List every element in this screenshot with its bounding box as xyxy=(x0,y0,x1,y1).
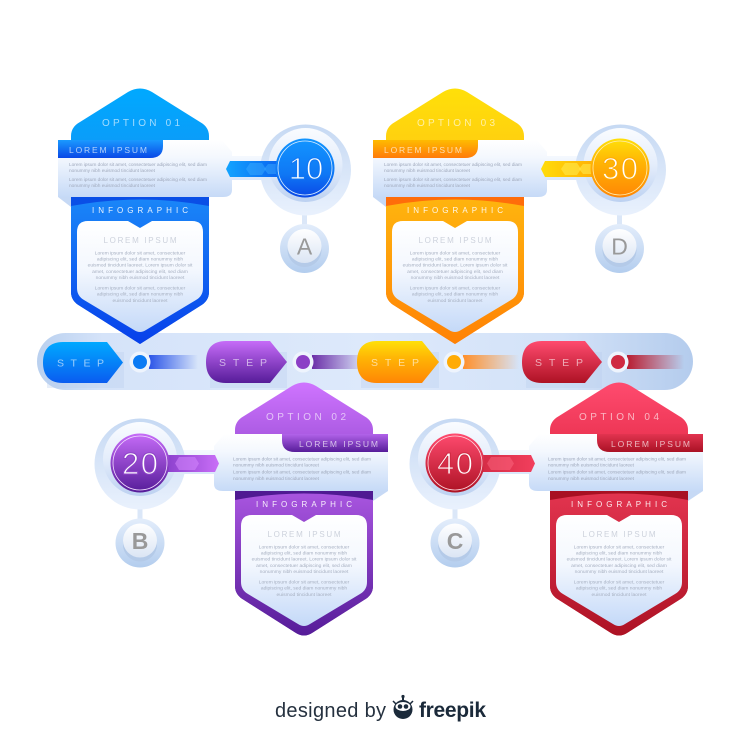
inner text: amet, consectetuer adipiscing elit, sed diam xyxy=(571,563,667,569)
inner text: nonummy nibh euismod tincidunt laoreet xyxy=(96,275,185,281)
badge: D: D xyxy=(611,234,628,260)
inner text: Lorem ipsum dolor sit amet, consectetuer xyxy=(259,580,350,586)
inner text: adipiscing elit, sed diam nonummy nibh xyxy=(261,551,347,557)
badge: 20: 20 xyxy=(122,446,158,481)
band text: Lorem ipsum dolor sit amet, consectetuer adipiscing elit, sed diam xyxy=(69,162,207,168)
band text xyxy=(548,456,686,482)
band text: nonummy nibh euismod tincidunt laoreet xyxy=(69,183,156,189)
band text: Lorem ipsum dolor sit amet, consectetuer adipiscing elit, sed diam xyxy=(233,470,371,476)
step 2 marker xyxy=(292,352,359,372)
band text xyxy=(233,456,371,482)
panel: option 02: LOREM IPSUM xyxy=(299,439,378,449)
inner text: Lorem ipsum dolor sit amet, consectetuer xyxy=(95,251,186,257)
icon: freepik mascot xyxy=(393,695,413,719)
band text: nonummy nibh euismod tincidunt laoreet xyxy=(69,168,156,174)
panel: option 04: INFOGRAPHIC xyxy=(571,500,667,509)
panel: option 03: LOREM IPSUM xyxy=(384,145,462,155)
inner text: euismod tincidunt laoreet xyxy=(428,298,483,304)
inner text: Lorem ipsum dolor sit amet, consectetuer xyxy=(410,251,501,257)
step 3 marker xyxy=(444,352,519,372)
panel: option 04: OPTION 04 xyxy=(579,412,659,423)
band text: nonummy nibh euismod tincidunt laoreet xyxy=(548,462,635,468)
panel: option 01: LOREM IPSUM xyxy=(69,145,147,155)
inner text: amet, consectetuer adipiscing elit, sed diam xyxy=(407,269,503,275)
badge: C xyxy=(430,518,480,568)
badge: 40 xyxy=(410,418,535,522)
badge: 30: 30 xyxy=(602,151,638,186)
inner text: adipiscing elit, sed diam nonummy nibh xyxy=(576,586,662,592)
band text: nonummy nibh euismod tincidunt laoreet xyxy=(384,168,471,174)
inner text: amet, consectetuer adipiscing elit, sed diam xyxy=(92,269,188,275)
band text: Lorem ipsum dolor sit amet, consectetuer adipiscing elit, sed diam xyxy=(384,162,522,168)
badge: C: C xyxy=(447,528,463,554)
inner text: euismod tincidunt laoreet. Lorem ipsum dolor sit xyxy=(567,557,672,563)
band text: Lorem ipsum dolor sit amet, consectetuer adipiscing elit, sed diam xyxy=(233,456,371,462)
step 1: STEP xyxy=(57,358,104,370)
panel: option 03 xyxy=(373,88,580,344)
badge: A xyxy=(280,224,329,273)
band text: nonummy nibh euismod tincidunt laoreet xyxy=(548,476,635,482)
inner text: nonummy nibh euismod tincidunt laoreet xyxy=(575,569,664,575)
inner text: adipiscing elit, sed diam nonummy nibh xyxy=(97,292,183,298)
inner text: adipiscing elit, sed diam nonummy nibh xyxy=(261,586,347,592)
badge: B xyxy=(116,518,164,568)
footer credit xyxy=(275,695,486,722)
band text: Lorem ipsum dolor sit amet, consectetuer adipiscing elit, sed diam xyxy=(384,177,522,183)
badge: 20 xyxy=(94,418,219,522)
badge: 10 xyxy=(226,124,351,228)
arrow xyxy=(226,161,280,177)
band text: nonummy nibh euismod tincidunt laoreet xyxy=(233,462,320,468)
arrow xyxy=(480,455,535,472)
step 3 xyxy=(357,341,439,383)
panel: option 02 xyxy=(181,382,388,636)
badge: 30 xyxy=(541,124,666,228)
step 1 xyxy=(43,342,123,383)
inner text: nonummy nibh euismod tincidunt laoreet xyxy=(411,275,500,281)
inner text: adipiscing elit, sed diam nonummy nibh xyxy=(412,257,498,263)
step 1 marker xyxy=(130,352,198,372)
arrow xyxy=(541,161,595,177)
panel: option 01: LOREM IPSUM xyxy=(104,236,177,245)
inner text xyxy=(567,545,672,598)
step 4 marker xyxy=(608,352,684,372)
panel: option 04 xyxy=(496,382,703,636)
band text: nonummy nibh euismod tincidunt laoreet xyxy=(384,183,471,189)
step bar xyxy=(37,333,693,390)
inner text xyxy=(88,251,193,304)
inner text: amet, consectetuer adipiscing elit, sed diam xyxy=(256,563,352,569)
inner text: Lorem ipsum dolor sit amet, consectetuer xyxy=(574,545,665,551)
inner text: euismod tincidunt laoreet xyxy=(113,298,168,304)
footer credit: freepik xyxy=(419,699,486,722)
panel: option 01: INFOGRAPHIC xyxy=(92,206,188,215)
inner text: adipiscing elit, sed diam nonummy nibh xyxy=(412,292,498,298)
band text xyxy=(384,162,522,189)
panel: option 03: INFOGRAPHIC xyxy=(407,206,503,215)
panel: option 02: LOREM IPSUM xyxy=(268,530,341,539)
panel: option 02: INFOGRAPHIC xyxy=(256,500,352,509)
step 2 xyxy=(206,341,287,383)
inner text: Lorem ipsum dolor sit amet, consectetuer xyxy=(410,286,501,292)
panel: option 03: LOREM IPSUM xyxy=(418,236,492,245)
band text: Lorem ipsum dolor sit amet, consectetuer adipiscing elit, sed diam xyxy=(69,177,207,183)
badge: 10: 10 xyxy=(289,151,323,186)
step 3: STEP xyxy=(371,357,419,369)
arrow xyxy=(165,455,219,472)
inner text: adipiscing elit, sed diam nonummy nibh xyxy=(97,257,183,263)
badge: D xyxy=(595,224,644,273)
panel: option 03: OPTION 03 xyxy=(417,118,495,129)
inner text: euismod tincidunt laoreet xyxy=(592,592,647,598)
panel: option 01: OPTION 01 xyxy=(102,118,180,129)
badge: A: A xyxy=(297,234,313,260)
inner text: adipiscing elit, sed diam nonummy nibh xyxy=(576,551,662,557)
inner text: euismod tincidunt laoreet. Lorem ipsum dolor sit xyxy=(88,263,193,269)
band text xyxy=(69,162,207,189)
step 4: STEP xyxy=(535,357,583,369)
panel: option 02: OPTION 02 xyxy=(266,412,346,423)
inner text: nonummy nibh euismod tincidunt laoreet xyxy=(260,569,349,575)
inner text: Lorem ipsum dolor sit amet, consectetuer xyxy=(95,286,186,292)
inner text: euismod tincidunt laoreet. Lorem ipsum dolor sit xyxy=(403,263,508,269)
badge: 40: 40 xyxy=(437,446,473,481)
inner text xyxy=(252,545,357,598)
inner text: euismod tincidunt laoreet. Lorem ipsum dolor sit xyxy=(252,557,357,563)
band text: nonummy nibh euismod tincidunt laoreet xyxy=(233,476,320,482)
panel: option 01 xyxy=(58,88,265,344)
band text: Lorem ipsum dolor sit amet, consectetuer adipiscing elit, sed diam xyxy=(548,456,686,462)
inner text xyxy=(403,251,508,304)
band text: Lorem ipsum dolor sit amet, consectetuer adipiscing elit, sed diam xyxy=(548,470,686,476)
panel: option 04: LOREM IPSUM xyxy=(582,530,656,539)
inner text: euismod tincidunt laoreet xyxy=(277,592,332,598)
badge: B: B xyxy=(132,528,148,554)
inner text: Lorem ipsum dolor sit amet, consectetuer xyxy=(574,580,665,586)
step 4 xyxy=(522,341,602,383)
step 2: STEP xyxy=(219,357,267,369)
panel: option 04: LOREM IPSUM xyxy=(611,439,690,449)
inner text: Lorem ipsum dolor sit amet, consectetuer xyxy=(259,545,350,551)
footer credit: designed by xyxy=(275,700,386,722)
